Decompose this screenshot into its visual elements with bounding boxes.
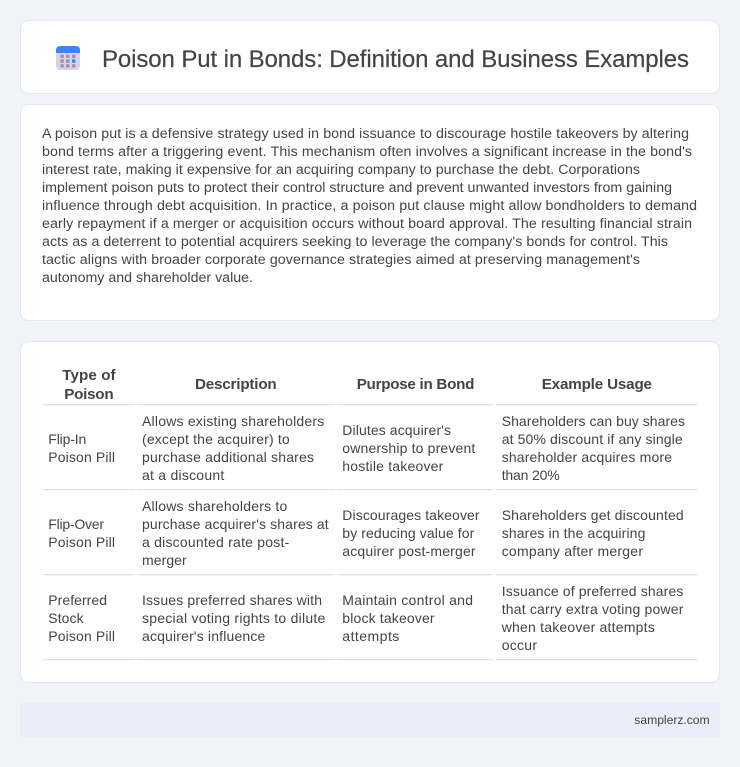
table row: Preferred Stock Poison Pill: Stock	[48, 610, 85, 626]
table row: Flip-In Poison Pill: Dilutes acquirer's	[342, 422, 451, 438]
table row: Flip-Over Poison Pill: by reducing value for	[342, 525, 475, 541]
table row: Flip-Over Poison Pill: Poison Pill	[48, 534, 115, 550]
table row: Flip-In Poison Pill: Allows existing shareholders	[142, 413, 324, 429]
table row: Flip-Over Poison Pill: merger	[142, 552, 187, 568]
table row: Flip-Over Poison Pill: company after merger	[502, 543, 643, 559]
table header row: Purpose in Bond	[357, 376, 474, 393]
table row: Flip-In Poison Pill	[48, 413, 685, 483]
table row: Flip-Over Poison Pill: Flip-Over	[48, 516, 104, 532]
table header row	[62, 367, 652, 403]
panel: definition paragraph	[20, 104, 720, 320]
table row: Flip-Over Poison Pill: a discounted rate post-	[142, 534, 290, 550]
table row: Preferred Stock Poison Pill: Maintain control and	[342, 592, 473, 608]
table row: Preferred Stock Poison Pill	[48, 583, 684, 653]
text block: definition: early repayment if a merger or acquisition occurs without board approval. The resulting financial strain	[42, 216, 692, 232]
table header row: Example Usage	[542, 376, 652, 393]
table row: Flip-In Poison Pill: ownership to prevent	[342, 440, 475, 456]
table row: Flip-In Poison Pill: hostile takeover	[342, 458, 444, 474]
table row: Preferred Stock Poison Pill: block takeover	[342, 610, 435, 626]
table row: Flip-Over Poison Pill: Allows shareholders to	[142, 498, 288, 514]
table row: Preferred Stock Poison Pill: Poison Pill	[48, 628, 115, 644]
table row: Flip-Over Poison Pill: purchase acquirer's shares at	[142, 516, 329, 532]
table row: Flip-In Poison Pill: Shareholders can buy shares	[502, 413, 685, 429]
text block: definition: interest rate, making it expensive for an acquiring company to purchase the debt. Corporations	[42, 162, 640, 178]
table row: Preferred Stock Poison Pill: that carry extra voting power	[502, 601, 684, 617]
table row: Preferred Stock Poison Pill: attempts	[342, 628, 399, 644]
table row: Flip-In Poison Pill: Poison Pill	[48, 449, 115, 465]
icon: calendar	[56, 46, 80, 70]
table row: Flip-In Poison Pill: at a discount	[142, 467, 224, 483]
table row: Flip-Over Poison Pill	[48, 498, 684, 568]
table row: Flip-Over Poison Pill: Discourages takeover	[342, 507, 480, 523]
text block: definition: implement poison puts to protect their control structure and prevent unwanted investors from gaining	[42, 180, 672, 196]
table row: Flip-In Poison Pill: Flip-In	[48, 431, 86, 447]
table header row: Description	[195, 376, 277, 393]
text block: definition: autonomy and shareholder value.	[42, 270, 253, 286]
table row: Preferred Stock Poison Pill: acquirer's influence	[142, 628, 266, 644]
table row: Flip-In Poison Pill: (except the acquirer) to	[142, 431, 290, 447]
text block: definition: bond terms after a triggering event. This mechanism often involves a significant increase in the bond's	[42, 144, 692, 160]
text block: definition: acts as a deterrent to potential acquirers seeking to leverage the company's bonds for control. This	[42, 234, 668, 250]
text block: definition: influence through debt acquisition. In practice, a poison put clause might allow bondholders to demand	[42, 198, 697, 214]
table row: Flip-In Poison Pill: shareholder acquires more	[502, 449, 672, 465]
table row: Preferred Stock Poison Pill: occur	[502, 637, 537, 653]
table row: Flip-In Poison Pill: at 50% discount if any single	[502, 431, 683, 447]
table row: Preferred Stock Poison Pill: special voting rights to dilute	[142, 610, 326, 626]
text block: definition: tactic aligns with broader corporate governance strategies aimed at preserving management's	[42, 252, 640, 268]
table row: Flip-Over Poison Pill: shares in the acquiring	[502, 525, 645, 541]
panel: title header	[20, 20, 720, 94]
table row: Flip-Over Poison Pill: acquirer post-merger	[342, 543, 476, 559]
table row: Flip-In Poison Pill: purchase additional shares	[142, 449, 314, 465]
table row: Preferred Stock Poison Pill: when takeover attempts	[501, 619, 655, 635]
panel: comparison table	[20, 342, 720, 682]
table header row: Type of	[62, 367, 117, 384]
table header row: Poison	[64, 386, 114, 403]
table row: Flip-In Poison Pill: than 20%	[502, 467, 560, 483]
footer credit: samplerz.com	[634, 713, 710, 727]
footer bar	[20, 703, 720, 737]
table row: Preferred Stock Poison Pill: Issuance of preferred shares	[502, 583, 683, 599]
text block: definition: A poison put is a defensive strategy used in bond issuance to discourage hostile takeovers by altering	[42, 126, 689, 142]
title: Poison Put in Bonds: Definition and Business Examples	[102, 46, 689, 73]
table row: Flip-Over Poison Pill: Shareholders get discounted	[502, 507, 684, 523]
text block: definition	[42, 126, 697, 286]
table row: Preferred Stock Poison Pill: Issues preferred shares with	[142, 592, 322, 608]
table row: Preferred Stock Poison Pill: Preferred	[48, 592, 107, 608]
